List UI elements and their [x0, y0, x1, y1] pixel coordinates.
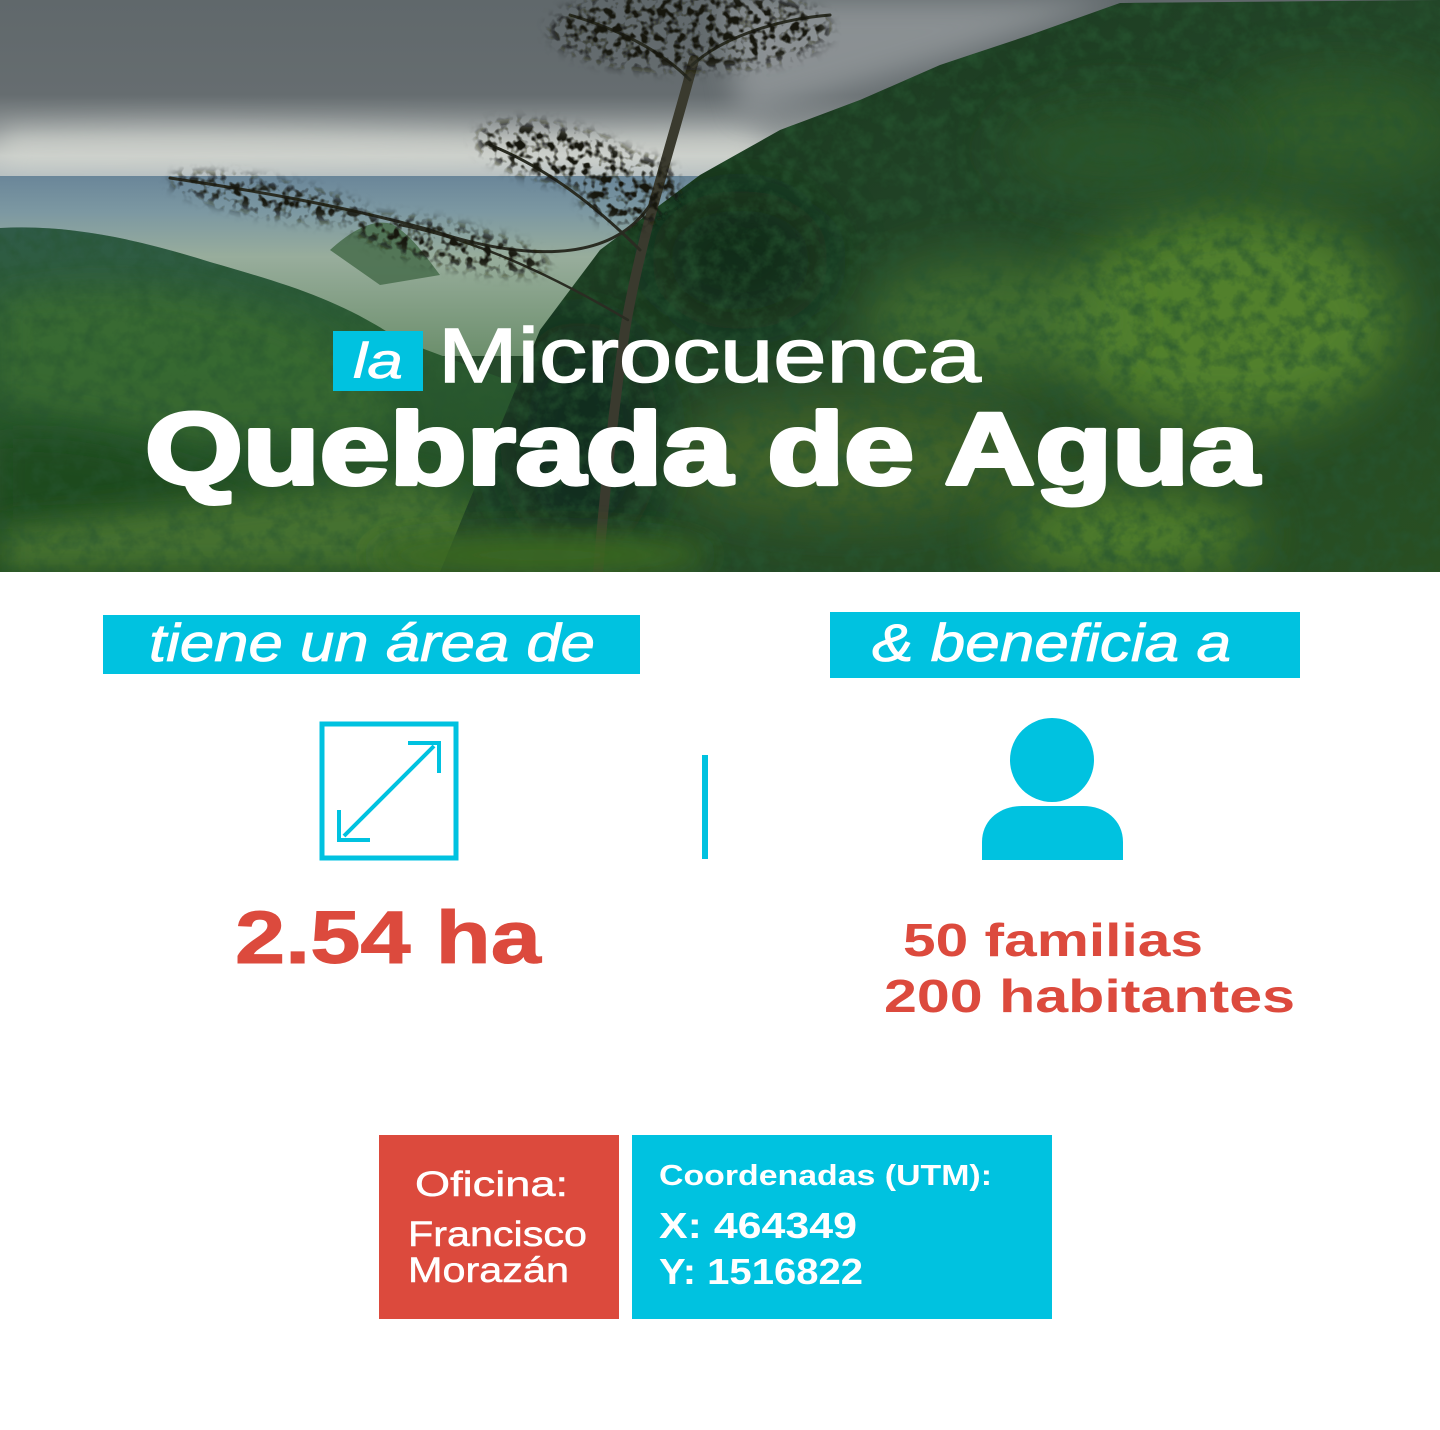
divider line — [702, 755, 708, 859]
panel: beneficiaries — [830, 612, 1300, 1022]
heading: tiene un área de: tiene un área de — [149, 614, 595, 673]
foreground tree — [170, 15, 830, 572]
branches — [170, 178, 650, 252]
panel: office — [379, 1135, 619, 1319]
right forest slope — [440, 0, 1440, 572]
title — [145, 313, 1261, 506]
icon: person — [982, 718, 1123, 860]
left hills — [0, 227, 518, 566]
heading: & beneficia a — [830, 612, 1300, 678]
office label: Oficina: — [415, 1165, 568, 1204]
heading line 2: Quebrada de Agua — [145, 392, 1261, 506]
trunk — [598, 60, 694, 572]
distant valley — [0, 176, 720, 356]
foreground foliage at bottom — [370, 533, 710, 577]
office name: Francisco — [408, 1215, 587, 1254]
heading: & beneficia a: & beneficia a — [872, 614, 1231, 673]
office name — [408, 1215, 587, 1290]
panel: area — [103, 614, 640, 979]
value: 50 familias: 50 familias — [903, 914, 1203, 966]
coordinates label: Coordenadas (UTM): — [659, 1160, 992, 1192]
label chip: la: la — [353, 333, 403, 389]
label chip: la — [333, 331, 423, 391]
coordinate values: Y: 1516822 — [659, 1251, 863, 1292]
coordinate values — [659, 1205, 863, 1292]
forest light patches — [1060, 210, 1400, 430]
office name: Morazán — [408, 1251, 569, 1290]
value: 2.54 ha: 2.54 ha — [235, 896, 542, 979]
value: 200 habitantes: 200 habitantes — [884, 970, 1295, 1022]
sky — [0, 0, 1440, 190]
icon: expand arrow in square — [322, 724, 456, 858]
base ground colour — [442, 356, 524, 384]
hero photo: forested mountain landscape — [0, 0, 1440, 577]
coordinate values: X: 464349 — [659, 1205, 857, 1246]
heading line 1: Microcuenca — [438, 313, 981, 399]
tree foliage — [169, 0, 830, 285]
small distant peak — [330, 223, 440, 285]
hill light patches — [0, 288, 400, 440]
panel: coordinates — [632, 1135, 1052, 1319]
